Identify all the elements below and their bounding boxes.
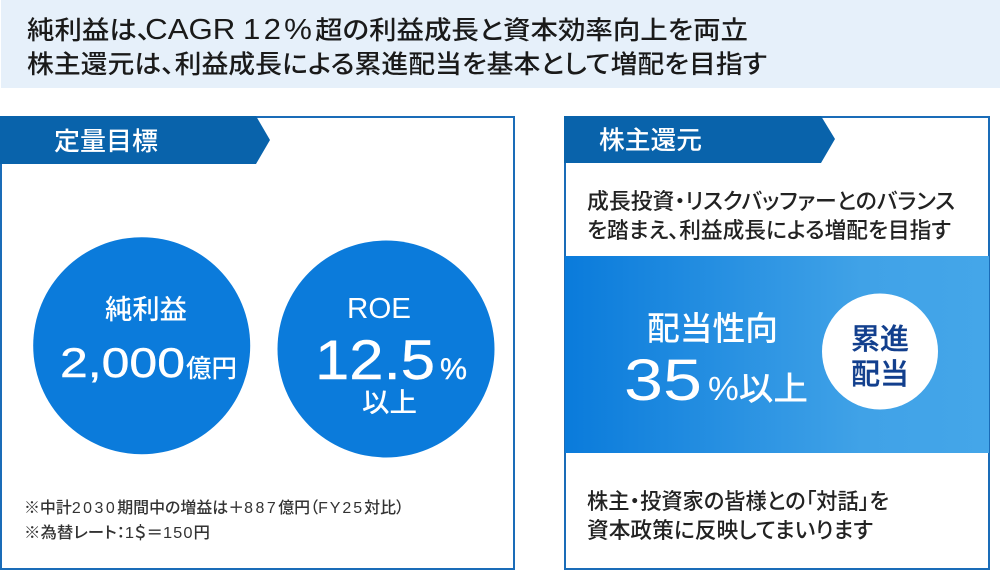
text: dialogue with shareholders: 株主・投資家の皆様との「対話」を [587,489,889,514]
panel header: 定量目標: 定量目標 [54,128,158,156]
title line 2: 株主還元は、利益成長による累進配当を基本として増配を目指す [27,51,767,79]
panel header: 株主還元: 株主還元 [599,127,702,155]
title line 1: 純利益は、CAGR 12%超の利益成長と資本効率向上を両立 [27,14,748,46]
badge: progressive dividend: 累進 [851,323,909,356]
title band [1,0,1000,88]
panel header: 株主還元 [564,116,835,163]
panel: quantitative targets [0,116,514,569]
footnotes [24,499,404,542]
gradient band: payout ratio: 配当性向 [647,310,778,347]
badge: progressive dividend: 配当 [851,358,909,391]
panel: shareholder returns [564,116,989,569]
footnotes: ※為替レート：1＄＝150円 [24,524,210,542]
circle: net profit: 億円 [186,355,237,383]
text: growth investment balance: 成長投資・リスクバッファーとのバランス [587,189,955,214]
gradient band: payout ratio [565,256,989,453]
gradient band: payout ratio: 35 [624,348,702,413]
footnotes: ※中計2030期間中の増益は＋887億円（FY25対比） [24,499,404,517]
text: growth investment balance [587,189,955,243]
circle: ROE: 以上 [362,388,417,418]
circle: ROE: % [440,353,467,386]
gradient band: payout ratio: %以上 [708,370,808,407]
circle: ROE [278,240,494,458]
circle: ROE: 12.5 [315,328,435,391]
circle: ROE: ROE [347,293,411,325]
text: dialogue with shareholders [587,489,889,543]
circle: net profit: 2,000 [60,339,185,386]
text: dialogue with shareholders: 資本政策に反映してまいります [587,518,873,543]
panel header: 定量目標 [0,116,270,164]
circle: net profit [33,237,250,454]
circle: net profit: 純利益 [105,295,187,325]
badge: progressive dividend [822,294,938,410]
text: growth investment balance: を踏まえ、利益成長による増配を目指す [587,218,951,243]
